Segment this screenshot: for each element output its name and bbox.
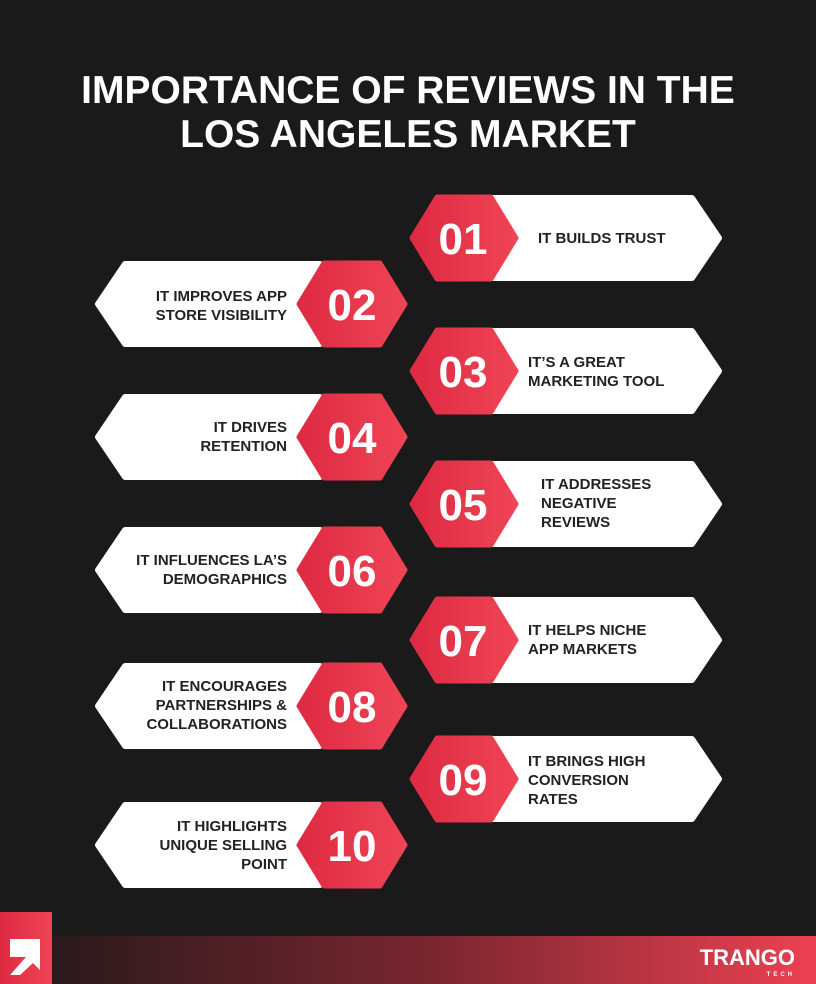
card 03: MARKETING TOOL bbox=[528, 373, 664, 390]
card 08: IT ENCOURAGES bbox=[162, 678, 287, 695]
card 02: STORE VISIBILITY bbox=[156, 307, 287, 324]
card 06: DEMOGRAPHICS bbox=[163, 571, 287, 588]
title bbox=[81, 69, 735, 156]
card 06: IT INFLUENCES LA’S bbox=[136, 552, 287, 569]
footer bar bbox=[52, 936, 816, 984]
card 07 bbox=[412, 599, 719, 681]
card 02 bbox=[98, 263, 405, 345]
card 08 bbox=[98, 665, 405, 747]
card 04: RETENTION bbox=[200, 438, 287, 455]
card 05: NEGATIVE bbox=[541, 495, 617, 512]
card 03: 03 bbox=[439, 348, 487, 397]
card 01: IT BUILDS TRUST bbox=[538, 230, 666, 247]
logo: trango tech: TRANGO bbox=[700, 945, 795, 970]
card 05: 05 bbox=[439, 481, 487, 530]
card 09: CONVERSION bbox=[528, 772, 629, 789]
card 03: IT’S A GREAT bbox=[528, 354, 625, 371]
card 04 bbox=[98, 396, 405, 478]
card 04: 04 bbox=[328, 414, 377, 463]
card 09: 09 bbox=[439, 756, 487, 805]
card 04: IT DRIVES bbox=[214, 419, 287, 436]
card 10 bbox=[98, 804, 405, 886]
card 05: IT ADDRESSES bbox=[541, 476, 651, 493]
card 09 bbox=[412, 738, 719, 820]
card 02: IT IMPROVES APP bbox=[156, 288, 287, 305]
card 01 bbox=[412, 197, 719, 279]
card 01: 01 bbox=[439, 215, 487, 264]
card 08: PARTNERSHIPS & bbox=[156, 697, 287, 714]
card 08: 08 bbox=[328, 683, 376, 732]
card 07: IT HELPS NICHE bbox=[528, 622, 646, 639]
card 09: IT BRINGS HIGH bbox=[528, 753, 646, 770]
title: LOS ANGELES MARKET bbox=[180, 113, 636, 156]
card 07: APP MARKETS bbox=[528, 641, 637, 658]
card 10: POINT bbox=[241, 856, 287, 873]
card 09: RATES bbox=[528, 791, 578, 808]
card 10: IT HIGHLIGHTS bbox=[177, 818, 287, 835]
card 07: 07 bbox=[439, 617, 487, 666]
card 10: 10 bbox=[328, 822, 376, 871]
card 08: COLLABORATIONS bbox=[146, 716, 287, 733]
icon: logo square bbox=[0, 912, 52, 984]
card 05: REVIEWS bbox=[541, 514, 610, 531]
card 03 bbox=[412, 330, 719, 412]
card 06 bbox=[98, 529, 405, 611]
card 06: 06 bbox=[328, 547, 376, 596]
logo: trango tech: TECH bbox=[767, 972, 795, 978]
title: IMPORTANCE OF REVIEWS IN THE bbox=[81, 69, 735, 112]
card 10: UNIQUE SELLING bbox=[159, 837, 287, 854]
card 05 bbox=[412, 463, 719, 545]
card 02: 02 bbox=[328, 281, 376, 330]
